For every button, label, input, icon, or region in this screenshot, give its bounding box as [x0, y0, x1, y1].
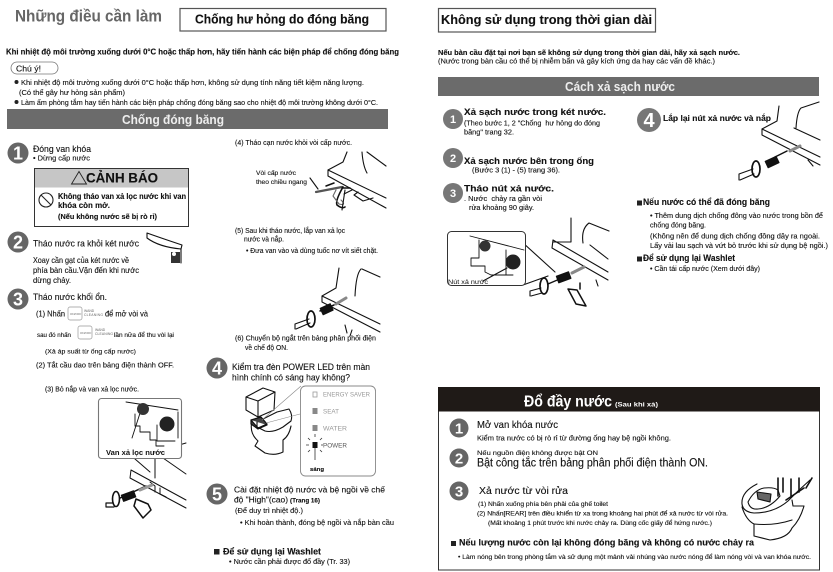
step 3: CLEANING — [95, 332, 113, 336]
note pill — [11, 62, 58, 74]
drain step 1: băng" trang 32. — [464, 130, 514, 136]
illustration: reinstalling valve — [295, 268, 380, 336]
step 3: 3 — [13, 290, 23, 310]
refill note — [451, 538, 811, 561]
warning box: khóa còn mở. — [58, 201, 110, 210]
section bar: how to drain — [438, 77, 819, 96]
illustration: filter valve — [98, 398, 186, 518]
intro text: (Nước trong bàn cầu có thể bị nhiễm bẩn và gây kích ứng da hay các vấn đề khác.) — [438, 56, 715, 66]
note bullets: Làm ấm phòng tắm hay tiến hành các biện pháp chống đóng băng sao cho nhiệt độ môi trường không dưới 0°C. — [21, 98, 378, 107]
LED panel: sáng — [310, 467, 325, 473]
reuse Washlet note: Để sử dụng lại Washlet — [223, 546, 321, 556]
refill step 3: (Mất khoảng 1 phút trước khi nước chảy ra. Dùng cốc giấy để hứng nước.) — [488, 518, 712, 527]
drain step 1: (Theo bước 1, 2 "Chống hư hỏng do đóng — [464, 119, 600, 128]
section bar: anti-freeze: Chống đóng băng — [122, 112, 224, 127]
refill header — [438, 387, 820, 412]
step 3: sau đó nhấn — [37, 330, 71, 339]
LED panel: ENERGY SAVER — [323, 392, 370, 398]
refill step 1: Mở van khóa nước — [477, 419, 558, 431]
refill step 2: 2 — [455, 450, 463, 468]
heading box: long-term non-use: Không sử dụng trong thời gian dài — [441, 12, 652, 27]
refill step 2: Bật công tắc trên bảng phân phối điện thành ON. — [477, 457, 708, 470]
step 2: phía bàn cầu.Vặn đến khi nước — [33, 266, 139, 275]
drain step 4: Lắp lại nút xả nước và nắp — [663, 112, 771, 123]
step 3 part 4 text: (4) Tháo cạn nước khỏi vòi cấp nước. — [235, 138, 352, 147]
step 3 part 5 text — [235, 226, 378, 255]
step 5: 5 — [212, 484, 222, 504]
drain step 3: Tháo nút xả nước. — [464, 184, 554, 195]
LED panel: POWER — [323, 442, 347, 450]
step 2: Tháo nước ra khỏi két nước — [33, 239, 139, 249]
note pill: Chú ý! — [16, 64, 41, 74]
step 1 — [8, 142, 91, 164]
illustration: drain plug — [448, 218, 609, 306]
drain step 4: 4 — [643, 110, 655, 132]
refill step 2 — [450, 448, 708, 470]
drain step 3 — [443, 183, 554, 212]
step 1: 1 — [13, 144, 23, 164]
refill note: • Làm nóng bên trong phòng tắm và sử dụng một mảnh vải nhúng vào nước nóng để làm nóng vòi và van khóa nước. — [458, 552, 811, 561]
illustration: supply hose: theo chiều ngang — [256, 177, 307, 186]
illustration: drain plug: Nút xả nước — [448, 279, 488, 286]
note: if water may have frozen: Nếu nước có thể đã đóng băng — [643, 197, 770, 207]
refill step 3: 3 — [455, 484, 463, 500]
drain step 2: Xả sạch nước bên trong ống — [464, 156, 594, 167]
illustration: supply hose — [256, 152, 386, 210]
illustration: toilet with seat — [246, 388, 292, 454]
warning box: CẢNH BÁO — [86, 170, 158, 186]
note: if water may have frozen: chống đóng băng. — [650, 220, 706, 230]
note: reuse Washlet — [637, 253, 760, 273]
step 2: Xoay cần gạt của két nước về — [33, 256, 129, 265]
refill step 2: Nếu nguồn điện không được bật ON — [477, 448, 598, 457]
step 2: 2 — [13, 232, 23, 252]
drain step 1 — [443, 107, 606, 136]
drain step 2: 2 — [450, 153, 456, 165]
step 2 — [8, 232, 139, 285]
LED panel: SEAT — [323, 408, 339, 416]
heading box: frost damage: Chống hư hỏng do đóng băng — [195, 12, 369, 26]
step 3 part 6 text: (6) Chuyển bộ ngắt trên bảng phân phối điện — [235, 334, 376, 343]
step 2: dừng chảy. — [33, 276, 71, 285]
heading box: long-term non-use — [438, 8, 656, 32]
step 3: CLEANING — [84, 313, 103, 317]
step 3 — [8, 288, 174, 394]
step 4: Kiểm tra đèn POWER LED trên màn — [232, 362, 370, 372]
LED panel: WATER — [323, 426, 347, 432]
step 3 part 5 text: (5) Sau khi tháo nước, lắp van xả lọc — [235, 226, 345, 235]
icon: tank lever — [147, 233, 182, 263]
section bar: anti-freeze — [7, 109, 388, 129]
step 5: độ "High"(cao) — [234, 495, 288, 505]
note: reuse Washlet: • Cần tái cấp nước (Xem dưới đây) — [650, 264, 760, 273]
note: reuse Washlet: Để sử dụng lại Washlet — [643, 253, 735, 263]
step 3 part 5 text: • Đưa van vào và dùng tuốc nơ vít siết chặt. — [246, 246, 378, 255]
illustration: toilet bowl — [742, 478, 812, 540]
page title: Những điều cần làm — [15, 6, 162, 26]
panel: right page, long-term non-use — [438, 8, 828, 570]
step 5: • Khi hoàn thành, đóng bệ ngồi và nắp bàn cầu — [240, 518, 394, 527]
refill header: Đổ đầy nước — [524, 392, 612, 410]
step 1: Đóng van khóa — [33, 144, 91, 154]
refill step 3: (1) Nhấn xuống phía bên phải của ghế toilet — [478, 499, 608, 508]
note: if water may have frozen: Lấy vải lau sạch và vứt bỏ trước khi sử dụng bệ ngồi.) — [650, 241, 828, 250]
note bullets — [14, 78, 378, 107]
step 3: (3) Bỏ nắp và van xả lọc nước. — [45, 385, 139, 394]
step 3: để mở vòi và — [105, 310, 149, 319]
step 3 part 6 text — [235, 334, 376, 352]
note: if water may have frozen: • Thêm dung dịch chống đông vào nước trong bồn để — [650, 211, 823, 220]
step 4: 4 — [212, 358, 222, 378]
note: if water may have frozen — [637, 197, 828, 250]
drain step 3: rửa khoảng 90 giây. — [469, 204, 534, 212]
refill step 3: Xả nước từ vòi rửa — [479, 485, 568, 497]
refill step 1: Kiểm tra nước có bị rò rỉ từ đường ống hay bệ ngồi không. — [477, 434, 671, 443]
step 4 — [206, 358, 370, 383]
illustration: filter valve: Van xả lọc nước — [106, 448, 165, 457]
section bar: how to drain: Cách xả sạch nước — [565, 80, 675, 94]
warning box — [34, 168, 188, 226]
step 4: hình chính có sáng hay không? — [232, 373, 350, 383]
drain step 1: 1 — [450, 114, 456, 126]
step 3: ON/OFF — [70, 312, 81, 316]
illustration: reinstall plug — [739, 102, 820, 180]
refill step 1 — [450, 418, 671, 443]
reuse Washlet note: • Nước cần phải được đổ đầy (Tr. 33) — [229, 557, 350, 566]
step 5: Cài đặt nhiệt độ nước và bệ ngồi về chế — [234, 485, 385, 495]
step 3 part 6 text: về chế độ ON. — [245, 343, 288, 352]
step 3: (Xả áp suất từ ống cấp nước) — [45, 346, 136, 355]
intro text — [438, 48, 740, 66]
step 3: Tháo nước khối ổn. — [33, 292, 107, 302]
warning box: Không tháo van xả lọc nước khi van — [58, 192, 186, 201]
drain step 1: Xả sạch nước trong két nước. — [464, 107, 606, 118]
note: if water may have frozen: (Không nên để dung dịch chống đông dây ra ngoài. — [650, 232, 820, 240]
heading box: frost damage — [180, 8, 386, 31]
refill step 3 — [450, 482, 728, 527]
step 3: (2) Tắt cầu dao trên bảng điện thành OFF. — [36, 361, 174, 370]
intro text: Nếu bàn cầu đặt tại nơi bạn sẽ không sử dụng trong thời gian dài, hãy xả sạch nước. — [438, 48, 740, 57]
panel: left page, frost damage prevention — [6, 6, 399, 566]
LED panel — [262, 386, 376, 476]
note bullets: (Có thể gây hư hỏng sản phẩm) — [19, 88, 125, 97]
intro text: Khi nhiệt độ môi trường xuống dưới 0°C hoặc thấp hơn, hãy tiến hành các biện pháp để chống đóng băng — [6, 48, 399, 56]
refill header: (Sau khi xả) — [615, 402, 658, 408]
step 3: WAND — [84, 309, 95, 313]
refill step 1: 1 — [455, 420, 463, 438]
step 1: • Dừng cấp nước — [33, 154, 90, 162]
step 3: ON/OFF — [80, 331, 91, 335]
step 5: (Trang 16) — [290, 499, 320, 505]
refill note: Nếu lượng nước còn lại không đóng băng và không có nước chảy ra — [459, 538, 755, 548]
drain step 2 — [443, 148, 594, 175]
illustration: supply hose: Vòi cấp nước — [256, 168, 297, 177]
panel: refill water — [438, 387, 820, 570]
step 5 — [206, 484, 394, 527]
drain step 3: . Nước chảy ra gần vòi — [464, 194, 542, 203]
step 3: lần nữa để thu vòi lại — [114, 330, 174, 339]
step 3: WAND — [95, 328, 106, 332]
drain step 4 — [637, 108, 771, 132]
step 5: (Để duy trì nhiệt độ.) — [235, 507, 303, 515]
drain step 2: (Bước 3 (1) - (5) trang 36). — [472, 168, 560, 175]
step 3 part 5 text: nước và nắp. — [244, 235, 284, 244]
note bullets: Khi nhiệt độ môi trường xuống dưới 0°C hoặc thấp hơn, không sử dụng tính năng tiết kiệm năng lượng. — [21, 78, 364, 87]
step 3: (1) Nhấn — [36, 310, 65, 319]
refill step 3: (2) Nhấn[REAR] trên điều khiển từ xa trong khoảng hai phút để xả nước từ vòi rửa. — [477, 509, 728, 518]
warning box: (Nếu không nước sẽ bị rò rỉ) — [58, 212, 157, 221]
drain step 3: 3 — [450, 188, 456, 200]
reuse Washlet note — [214, 546, 350, 566]
